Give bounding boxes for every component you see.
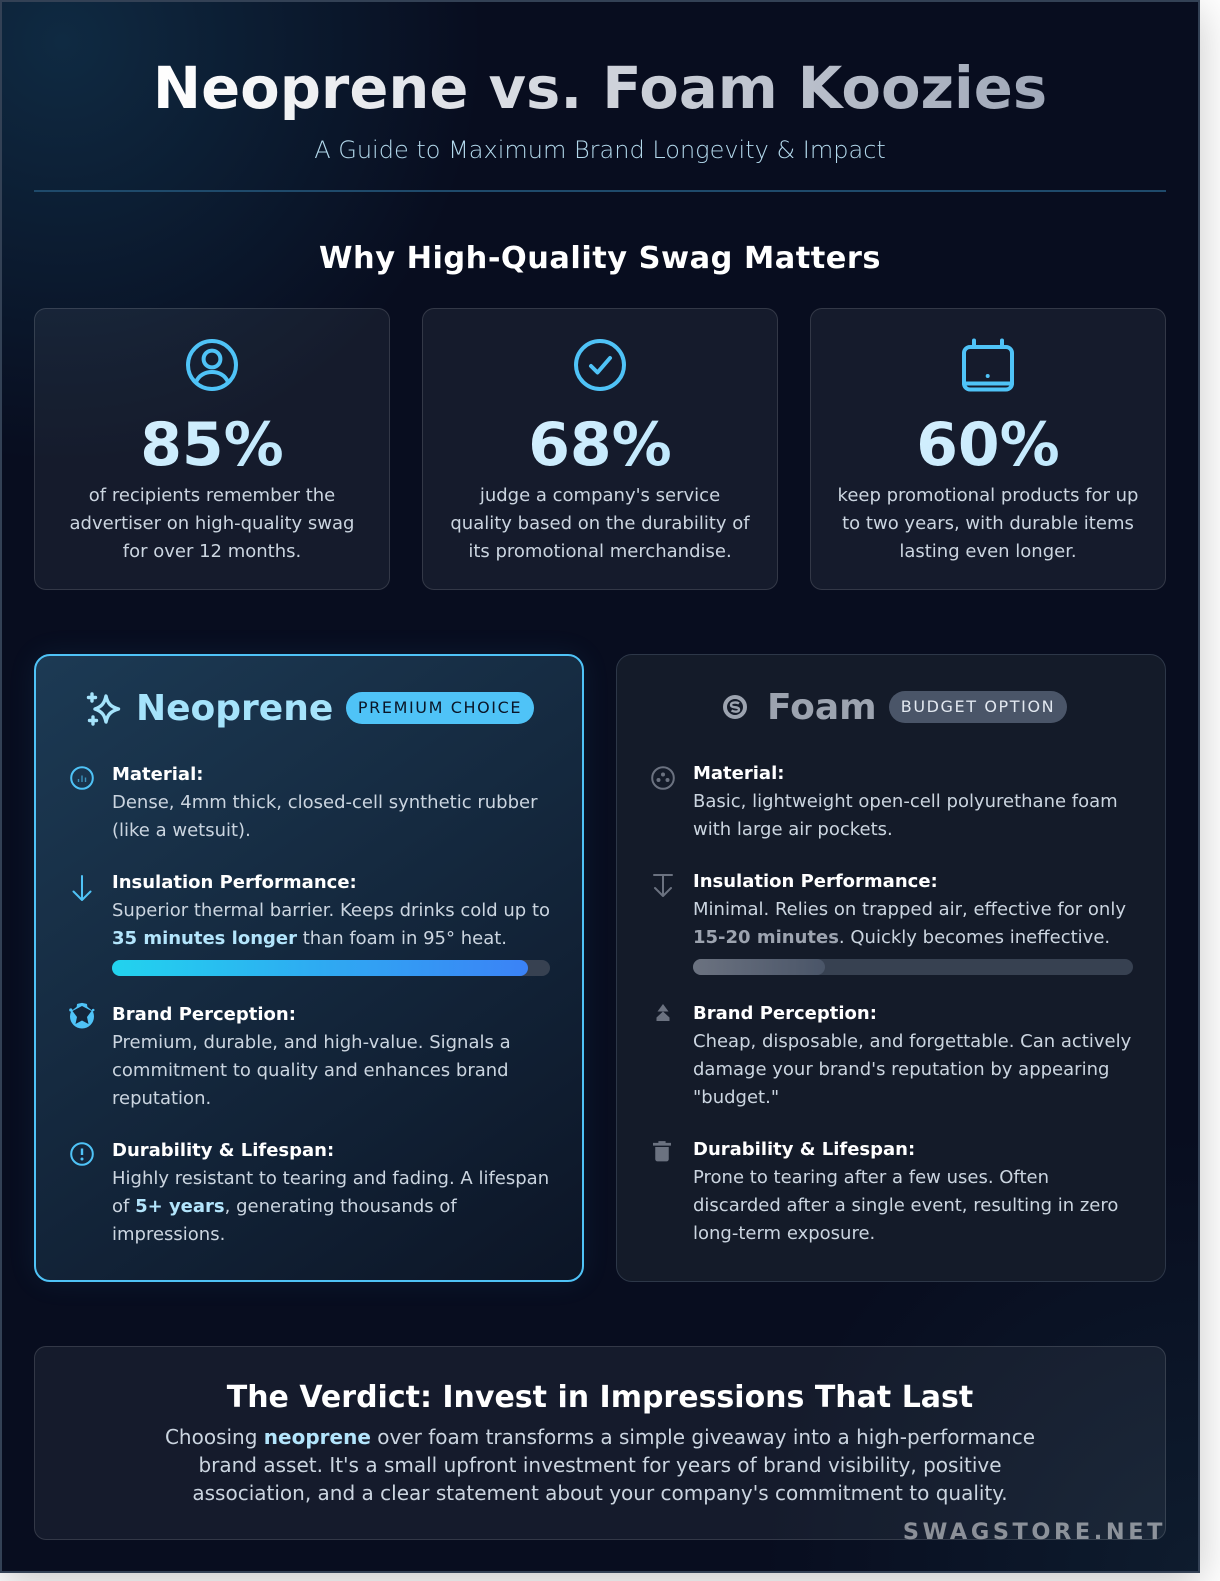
feature: insulation: Minimal. Relies on trapped air, effective for only [693,899,1126,920]
verdict heading: The Verdict: Invest in Impressions That Last [227,1380,973,1415]
feature: material [112,764,538,841]
feature: brand perception: Brand Perception: [112,1004,296,1025]
feature: durability: of 5+ years, generating thousands of [112,1196,457,1217]
panel: neoprene [34,654,584,1282]
description: judge a company's service [480,485,720,506]
feature: material [693,763,1118,840]
description: lasting even longer. [899,541,1077,562]
verdict text: association, and a clear statement about your company's commitment to quality. [192,1481,1008,1505]
description: to two years, with durable items [842,513,1134,534]
panel: verdict [34,1346,1166,1540]
bar: neoprene insulation [112,960,550,976]
badge: budget option: BUDGET OPTION [901,697,1055,716]
icon: alert circle [70,1142,94,1166]
panel: stat 85% [34,308,390,590]
feature: material: (like a wetsuit). [112,820,251,841]
feature: brand perception: "budget." [693,1087,779,1108]
feature: durability: Highly resistant to tearing and fading. A lifespan [112,1168,549,1189]
description: for over 12 months. [123,541,301,562]
description [838,485,1138,562]
feature: brand perception: Brand Perception: [693,1003,877,1024]
description: of recipients remember the [89,485,335,506]
feature: brand perception: commitment to quality and enhances brand [112,1060,509,1081]
feature: durability: Prone to tearing after a few uses. Often [693,1167,1049,1188]
verdict text: Choosing neoprene over foam transforms a simple giveaway into a high-performance [165,1425,1035,1449]
statistic: 60% [916,410,1060,480]
feature: durability: impressions. [112,1224,225,1245]
description [450,485,750,562]
icon: material [651,766,675,790]
verdict text [165,1425,1035,1505]
subtitle: A Guide to Maximum Brand Longevity & Impact [314,136,886,164]
icon: person [186,339,238,391]
section heading: Why High-Quality Swag Matters [319,241,881,276]
description: quality based on the durability of [450,513,750,534]
watermark: SWAGSTORE.NET [903,1519,1166,1545]
feature: brand perception [112,1004,511,1109]
feature: brand perception: reputation. [112,1088,211,1109]
panel: stat 60% [810,308,1166,590]
statistic: 85% [140,410,284,480]
icon: trash [653,1141,671,1162]
feature: brand perception [693,1003,1131,1108]
feature: insulation: 35 minutes longer than foam in 95° heat. [112,928,507,949]
description: its promotional merchandise. [468,541,732,562]
badge: premium choice [346,692,534,724]
icon: material [70,766,94,790]
badge: premium choice: PREMIUM CHOICE [358,698,522,717]
statistic: 68% [528,410,672,480]
verdict text: brand asset. It's a small upfront investment for years of brand visibility, positive [198,1453,1002,1477]
feature: durability: Durability & Lifespan: [693,1139,915,1160]
panel: foam [616,654,1166,1282]
feature: brand perception: damage your brand's reputation by appearing [693,1059,1109,1080]
feature: material: Dense, 4mm thick, closed-cell synthetic rubber [112,792,537,813]
feature: durability [693,1139,1118,1244]
feature: durability: long-term exposure. [693,1223,875,1244]
statistic [811,410,1165,480]
icon: badge star [68,1002,94,1028]
feature: material: Material: [112,764,203,785]
bar: foam insulation [693,959,1133,975]
statistic [35,410,389,480]
feature: material: Basic, lightweight open-cell polyurethane foam [693,791,1118,812]
feature: insulation [112,872,550,949]
feature: insulation: 15-20 minutes. Quickly becomes ineffective. [693,927,1110,948]
icon: sparkles [86,692,120,726]
title: Neoprene vs. Foam Koozies [153,55,1047,122]
feature: durability: Durability & Lifespan: [112,1140,334,1161]
feature: insulation: Insulation Performance: [693,871,938,892]
feature: insulation [693,871,1126,948]
badge: budget option [889,691,1067,723]
icon: calendar [962,338,1014,392]
icon: stacked arrows [656,1004,670,1021]
heading: foam: Foam [767,687,877,728]
description: keep promotional products for up [838,485,1138,506]
feature: insulation: Insulation Performance: [112,872,357,893]
icon: arrow to bar [653,874,673,897]
statistic [423,410,777,480]
feature: durability [112,1140,549,1245]
feature: insulation: Superior thermal barrier. Keeps drinks cold up to [112,900,550,921]
feature: brand perception: Premium, durable, and high-value. Signals a [112,1032,511,1053]
feature: material: Material: [693,763,784,784]
description: advertiser on high-quality swag [70,513,354,534]
heading: neoprene: Neoprene [136,688,333,729]
feature: material: with large air pockets. [693,819,893,840]
icon: arrow down [72,875,92,901]
feature: durability: discarded after a single event, resulting in zero [693,1195,1118,1216]
panel: stat 68% [422,308,778,590]
icon: foam emblem [723,695,747,719]
feature: brand perception: Cheap, disposable, and forgettable. Can actively [693,1031,1131,1052]
description [70,485,354,562]
icon: check circle [574,339,626,391]
